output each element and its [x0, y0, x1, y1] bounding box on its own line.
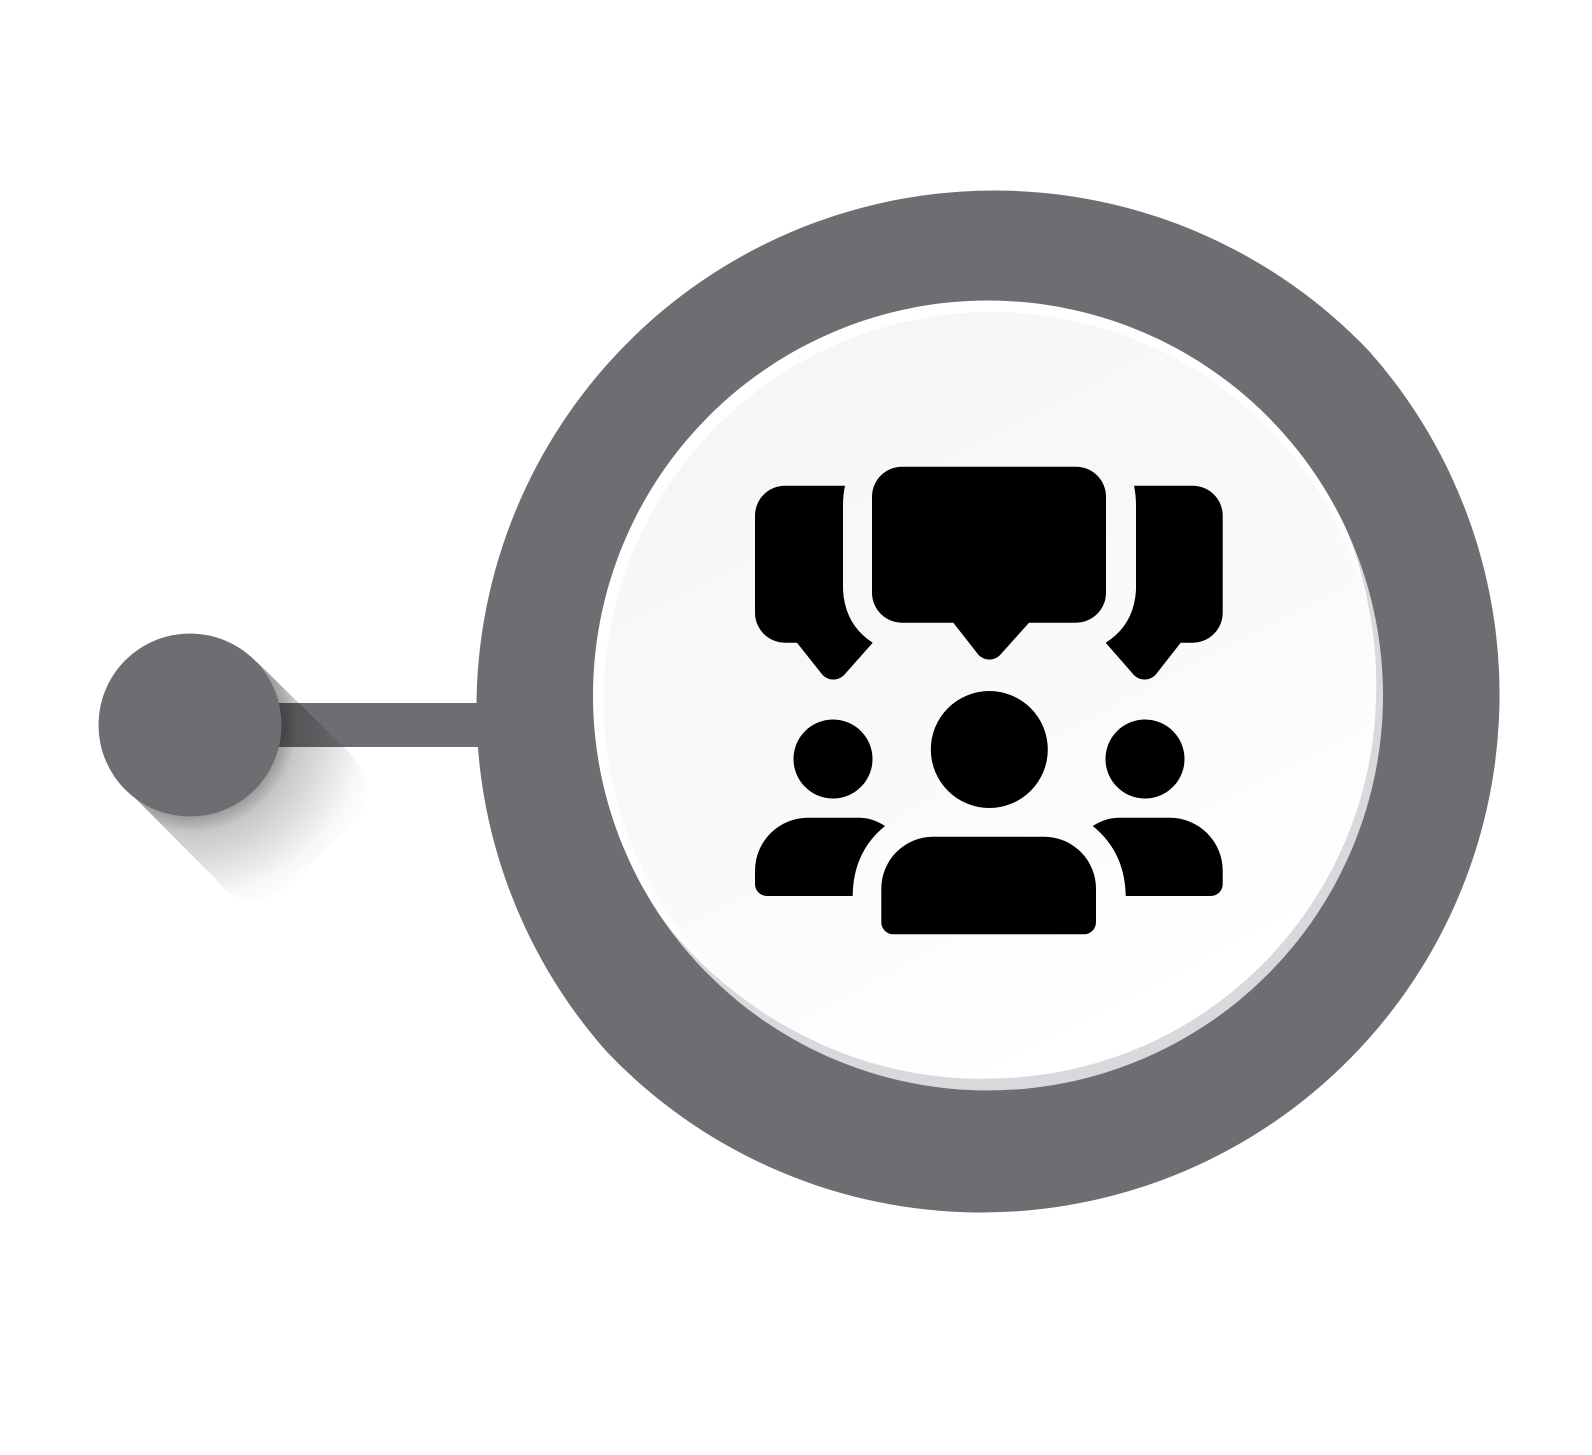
center speech bubble: [872, 467, 1106, 660]
right speech bubble: [1106, 486, 1223, 680]
left person head: [794, 720, 872, 798]
left person body: [755, 818, 885, 896]
center person head: [931, 691, 1048, 808]
center person body: [881, 837, 1096, 934]
connector node shadow: [135, 662, 368, 901]
disc face: [604, 312, 1380, 1088]
inner disc: [632, 312, 1383, 1090]
right person head: [1106, 720, 1184, 798]
connector bar: [270, 703, 495, 747]
icon: group discussion: [755, 467, 1223, 934]
infographic canvas: [98, 190, 1500, 1212]
disc bottom rim: [591, 298, 1385, 1092]
disc white layer: [569, 261, 1376, 1079]
outer ring: [476, 191, 1500, 1212]
right person body: [1093, 818, 1223, 896]
left speech bubble: [755, 486, 873, 680]
connector node: [98, 634, 282, 816]
